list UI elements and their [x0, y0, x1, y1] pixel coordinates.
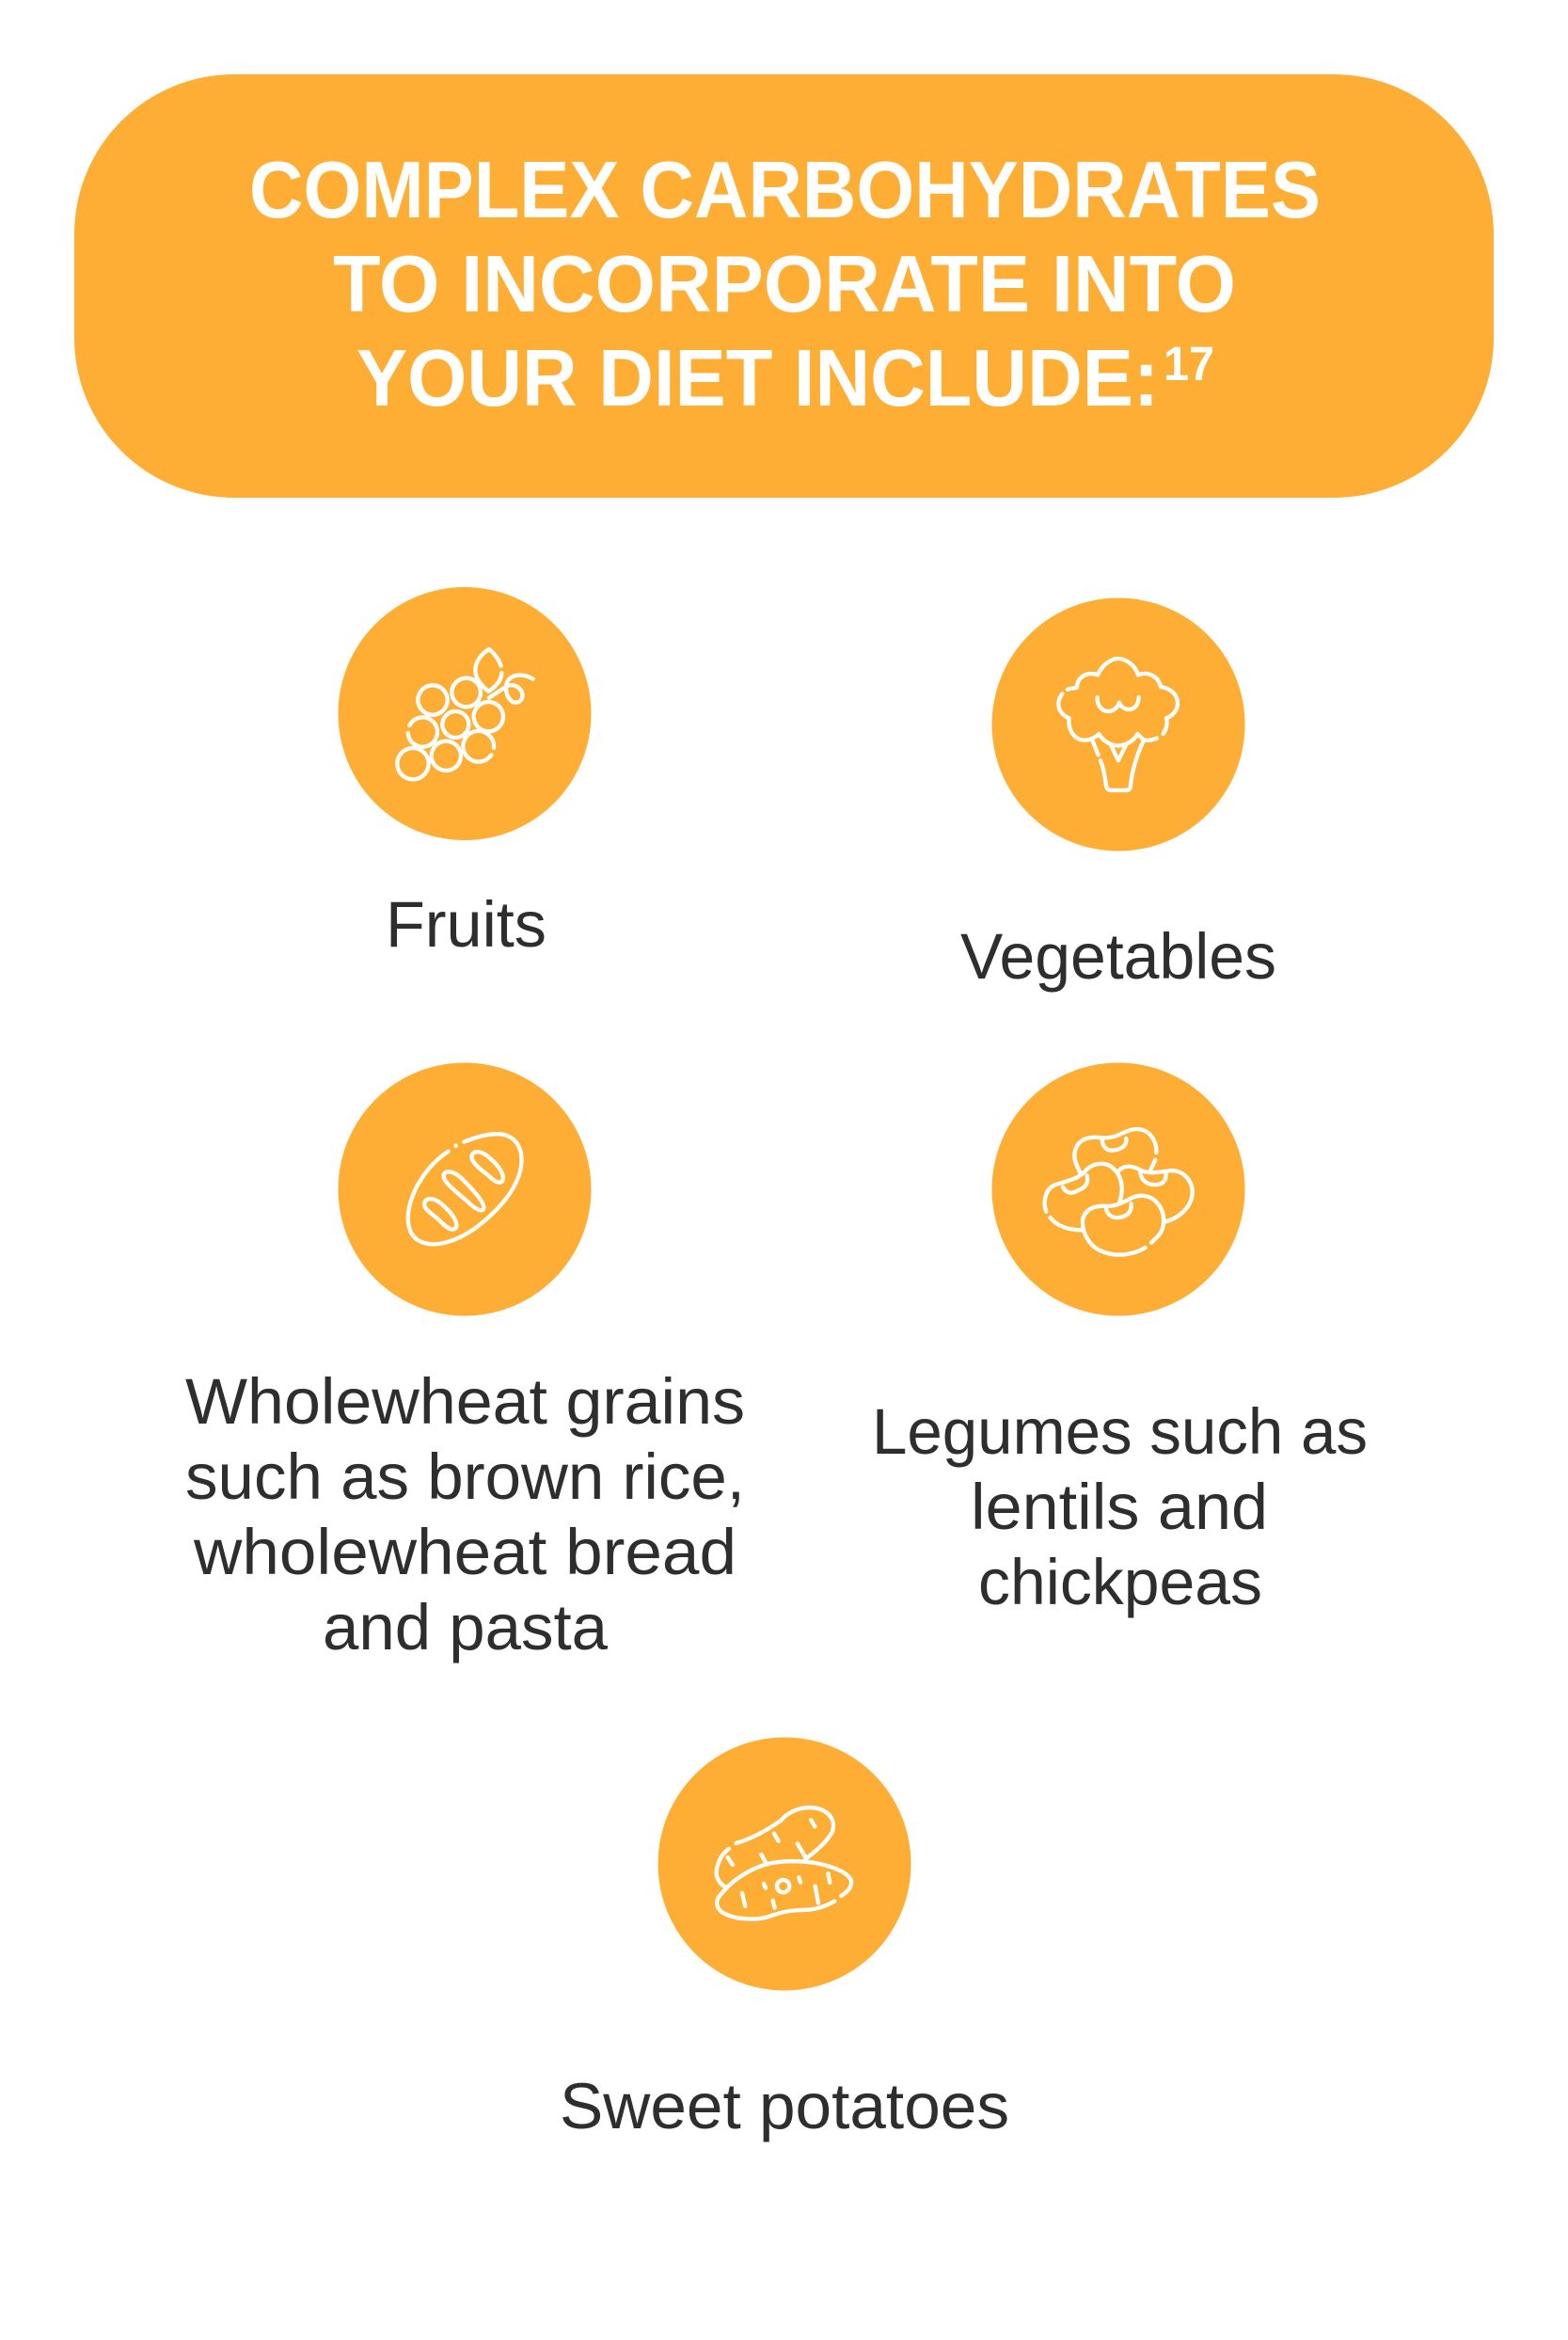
label: vegetables: Vegetables — [960, 920, 1276, 993]
title banner — [74, 74, 1494, 498]
icon circle: fruits — [339, 587, 591, 840]
title: 17 — [1164, 337, 1214, 390]
label: legumes: Legumes such as — [872, 1395, 1368, 1468]
label: wholewheat grains: such as brown rice, — [185, 1441, 745, 1513]
icon: bread loaf — [408, 1134, 522, 1244]
panel: wholewheat grains — [185, 1063, 745, 1663]
panel: legumes — [872, 1063, 1368, 1618]
label: sweet potatoes: Sweet potatoes — [560, 2070, 1009, 2142]
icon: broccoli — [1058, 659, 1178, 790]
panel: fruits — [339, 587, 591, 961]
icon: grapes — [397, 649, 533, 779]
icon circle: sweet potatoes — [658, 1737, 911, 1991]
title: YOUR DIET INCLUDE: — [356, 334, 1159, 423]
icon circle: grains — [339, 1063, 591, 1315]
label: wholewheat grains: and pasta — [323, 1591, 609, 1663]
panel: vegetables — [960, 598, 1276, 993]
label: legumes: chickpeas — [978, 1546, 1262, 1618]
label: wholewheat grains — [185, 1365, 745, 1663]
icon: sweet potatoes — [717, 1807, 851, 1919]
label: wholewheat grains: Wholewheat grains — [185, 1365, 745, 1438]
icon circle: legumes — [991, 1063, 1245, 1315]
label: wholewheat grains: wholewheat bread — [193, 1516, 736, 1588]
panel: sweet potatoes — [560, 1737, 1009, 2142]
label: legumes — [872, 1395, 1368, 1618]
title — [249, 146, 1321, 423]
title: COMPLEX CARBOHYDRATES — [249, 146, 1321, 235]
icon circle: vegetables — [991, 598, 1245, 851]
icon: beans — [1045, 1129, 1193, 1255]
label: legumes: lentils and — [971, 1471, 1268, 1543]
label: fruits: Fruits — [386, 888, 546, 961]
title: TO INCORPORATE INTO — [333, 240, 1236, 329]
